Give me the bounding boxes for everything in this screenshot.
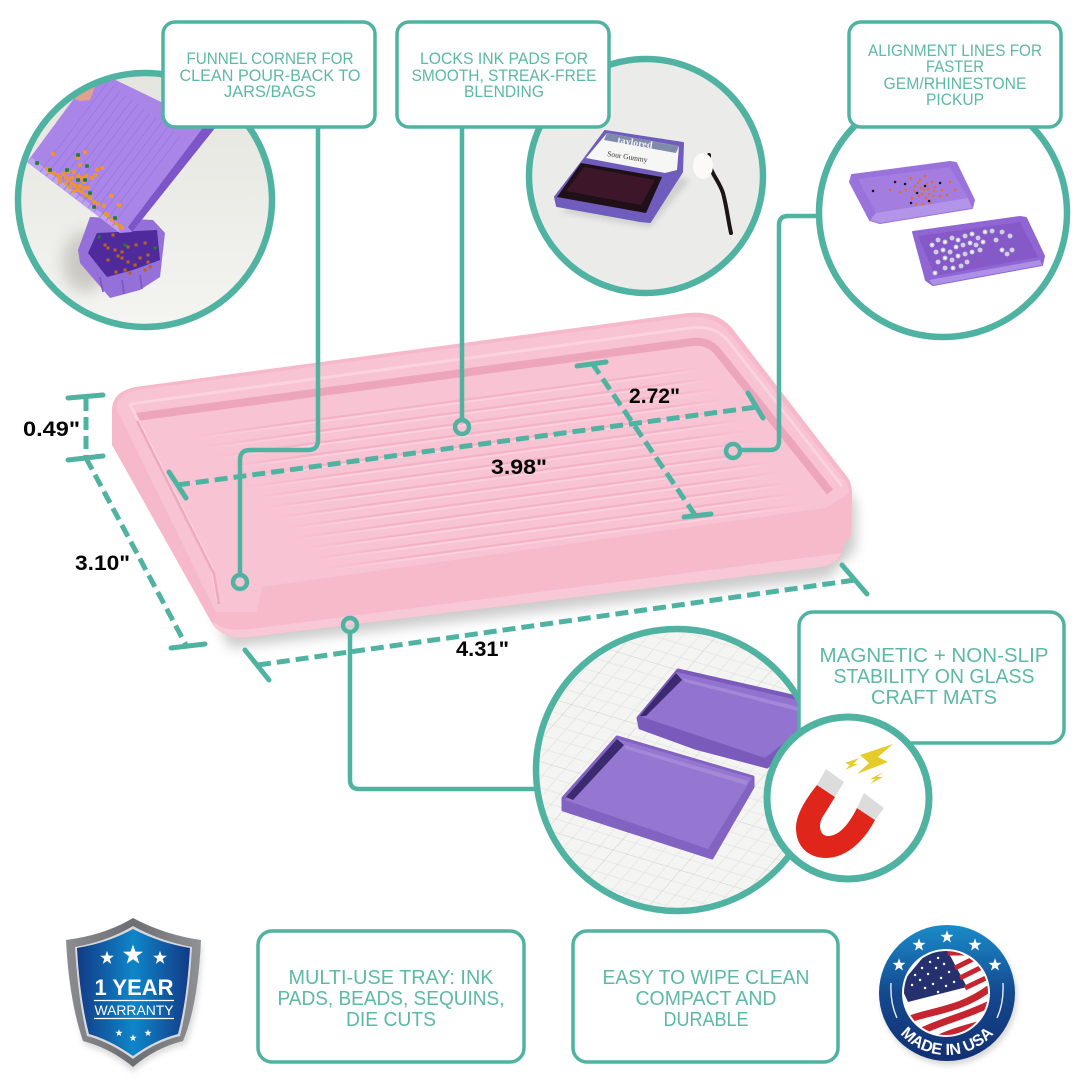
tray body outline [112,313,852,638]
tray inner rim highlight [130,328,842,486]
callout: easy to wipe clean: DURABLE [664,1008,748,1031]
leader line: magnetic base [343,618,537,789]
dimension: width 3.10 in [75,458,205,648]
photo circle: ink pad in tray: taylored [617,135,654,152]
callout: magnetic and non-slip [799,612,1064,743]
callout: alignment lines: PICKUP [926,91,984,109]
callout: locks ink pads: BLENDING [464,83,544,101]
photo circle: funnel corner pouring beads [18,70,272,327]
callout: alignment lines [849,22,1061,127]
photo circle: ink pad in tray: Sour Gummy [607,149,648,164]
dimension: inner width 2.72 in [577,362,711,517]
pink tray product [112,313,856,648]
callout: locks ink pads: SMOOTH, STREAK-FREE [412,67,596,85]
dimension: width 3.10 in: 3.10" [75,552,130,575]
callout: alignment lines: FASTER [926,58,984,76]
tray ridges [192,367,803,568]
dimension: height 0.49 in [23,395,103,460]
callout: locks ink pads [397,22,609,127]
photo circle: ink pad in tray [529,59,763,293]
leader line: ink pads [455,127,469,434]
badge: made in USA seal: MADE IN USA [900,1026,994,1055]
flag [904,951,988,1035]
photo circle: purple trays on glass craft mat [532,626,798,914]
callout: easy to wipe clean [573,931,838,1062]
callout: alignment lines: GEM/RHINESTONE [884,75,1026,93]
leader line: alignment lines [726,216,820,458]
callout: easy to wipe clean: COMPACT AND [636,987,776,1010]
callout: multi-use tray [258,931,524,1062]
dimension: inner width 2.72 in: 2.72" [629,385,680,408]
badge: 1 year warranty shield: 1 YEAR [94,975,174,1000]
callout: magnetic and non-slip: CRAFT MATS [871,686,997,709]
dimension: inner length 3.98 in: 3.98" [491,456,547,479]
badge: made in USA seal [878,925,1020,1068]
callout: multi-use tray: DIE CUTS [346,1008,436,1031]
icon: horseshoe magnet [767,717,929,879]
callout: funnel corner: JARS/BAGS [224,83,316,101]
callout: funnel corner: CLEAN POUR-BACK TO [180,67,361,85]
badge: 1 year warranty shield [66,918,202,1072]
callout: magnetic and non-slip: MAGNETIC + NON-SLIP [820,644,1048,667]
callout: multi-use tray: PADS, BEADS, SEQUINS, [278,987,504,1010]
callout: funnel corner: FUNNEL CORNER FOR [186,50,354,68]
tray top face [116,317,849,612]
leader line: funnel corner [233,127,318,589]
badge: 1 year warranty shield: WARRANTY [94,1002,174,1018]
photo circle: gems and rhinestones in trays [819,89,1067,337]
callout: multi-use tray: MULTI-USE TRAY: INK [288,966,494,989]
callout: easy to wipe clean: EASY TO WIPE CLEAN [602,966,810,989]
callout: magnetic and non-slip: STABILITY ON GLASS [834,665,1034,688]
callout: funnel corner [163,22,375,127]
tray front wall [213,492,851,638]
callout: locks ink pads: LOCKS INK PADS FOR [420,50,588,68]
dimension: inner length 3.98 in [169,393,763,498]
tray inner groove [136,342,830,492]
dimension: length 4.31 in [245,565,867,680]
dimension: length 4.31 in: 4.31" [456,638,509,661]
callout: alignment lines: ALIGNMENT LINES FOR [868,42,1042,60]
dimension: height 0.49 in: 0.49" [23,418,80,441]
